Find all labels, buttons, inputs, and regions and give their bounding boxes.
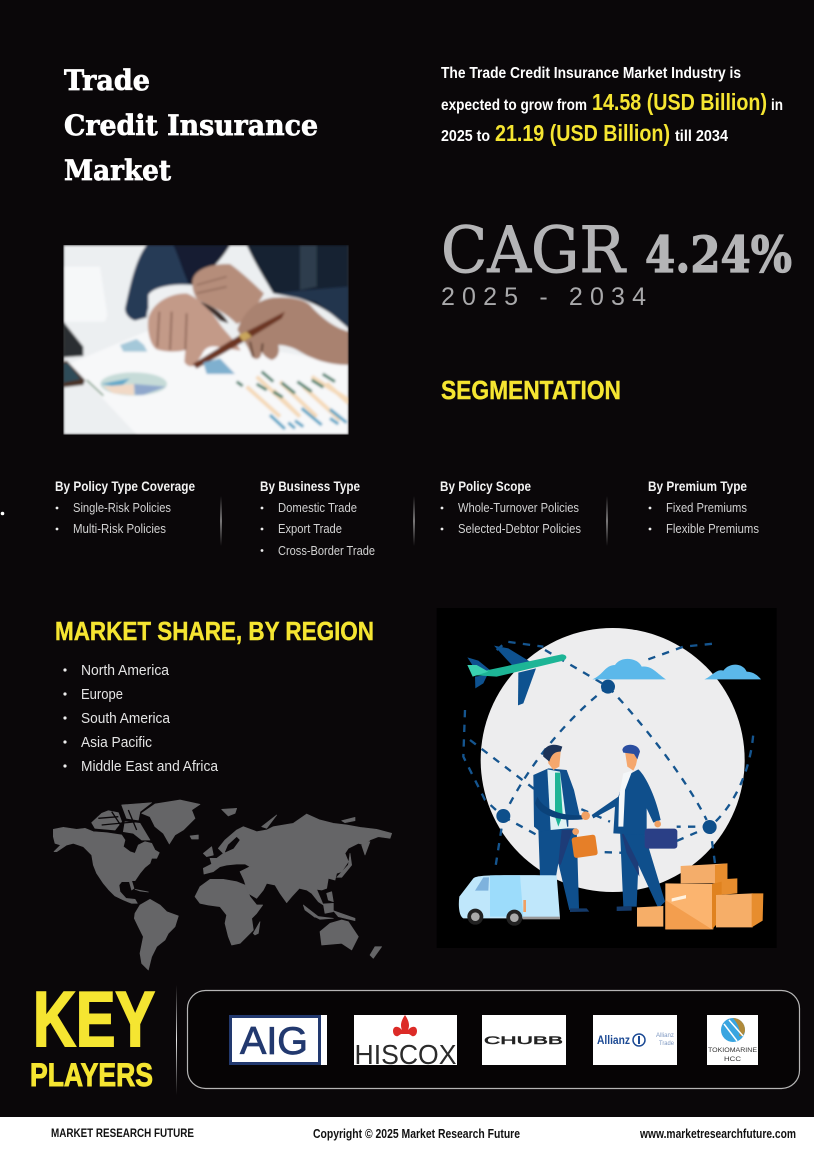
decorative dot: [1, 512, 4, 515]
heading: market share by region: MARKET SHARE, BY REGION: [55, 616, 374, 646]
segment: by business type: Cross-Border Trade: [278, 544, 375, 558]
businessman left: [533, 745, 598, 912]
footer: MARKET RESEARCH FUTURE: [51, 1126, 194, 1140]
logo: Tokio Marine HCC: [707, 1015, 758, 1065]
segment: by policy type coverage: Multi-Risk Policies: [73, 522, 166, 536]
world map: [53, 800, 392, 970]
segment: by premium type: By Premium Type: [648, 478, 747, 494]
segment: by premium type: [648, 478, 759, 536]
segment: by policy scope: Selected-Debtor Policies: [458, 522, 581, 536]
logo: Hiscox: HISCOX: [354, 1039, 457, 1070]
title: Market: [64, 154, 171, 187]
logo: Chubb: [482, 1015, 566, 1065]
market growth statement: in: [771, 97, 783, 114]
logo: AIG: [229, 1015, 327, 1065]
logo: Tokio Marine HCC: HCC: [724, 1056, 741, 1063]
region list: Middle East and Africa: [81, 758, 219, 775]
illustration: trade handshake and logistics: [437, 608, 777, 948]
heading: key players: PLAYERS: [30, 1057, 153, 1093]
dashed trade routes: [463, 642, 753, 870]
logo: Chubb: CHUBB: [484, 1035, 563, 1047]
heading: key players: [30, 975, 155, 1093]
market growth statement: 2025 to: [441, 128, 490, 145]
segment: by business type: Export Trade: [278, 522, 342, 536]
market growth statement: expected to grow from: [441, 97, 587, 114]
photo: business team reviewing charts: [63, 245, 349, 435]
segment: by policy type coverage: By Policy Type Coverage: [55, 478, 195, 494]
region list: [63, 662, 219, 775]
segment: by policy scope: Whole-Turnover Policies: [458, 501, 579, 515]
logo: Hiscox: [354, 1015, 457, 1070]
cardboard boxes: [637, 863, 763, 929]
segment: by policy type coverage: Single-Risk Policies: [73, 501, 171, 515]
CAGR figure: CAGR: [441, 214, 627, 288]
logo: Allianz Trade: Allianz: [597, 1033, 630, 1047]
airplane: [467, 646, 566, 705]
CAGR figure: [441, 214, 792, 311]
globe: [481, 628, 745, 892]
heading: segmentation: SEGMENTATION: [441, 375, 621, 405]
segment: by premium type: Flexible Premiums: [666, 522, 759, 536]
region list: South America: [81, 710, 171, 727]
segment: by business type: Domestic Trade: [278, 501, 357, 515]
logo: Tokio Marine HCC: TOKIOMARINE: [708, 1047, 758, 1054]
segment: by business type: By Business Type: [260, 478, 360, 494]
market growth statement: [441, 65, 783, 146]
title: Trade: [64, 64, 150, 97]
businessman right: [592, 745, 677, 911]
region list: Asia Pacific: [81, 734, 152, 751]
market growth statement: till 2034: [675, 128, 728, 145]
heading: key players: KEY: [33, 975, 155, 1063]
market growth statement: The Trade Credit Insurance Market Industry is: [441, 65, 741, 82]
CAGR figure: 4.24%: [645, 225, 792, 284]
market growth statement: 14.58 (USD Billion): [592, 89, 767, 115]
region list: North America: [81, 662, 170, 679]
clouds: [592, 659, 761, 679]
logo: Allianz Trade: [593, 1015, 677, 1065]
logo: Allianz Trade: Allianz: [656, 1033, 674, 1039]
segment: by business type: [260, 478, 375, 558]
title: [64, 64, 318, 187]
panel: company logos: [188, 990, 800, 1088]
van: [459, 875, 560, 926]
route nodes: [496, 680, 717, 834]
logo: Allianz Trade: Trade: [659, 1041, 675, 1047]
segment: by policy scope: [440, 478, 581, 536]
market growth statement: 21.19 (USD Billion): [495, 120, 670, 146]
footer: [0, 1117, 814, 1150]
footer: Copyright © 2025 Market Research Future: [313, 1127, 520, 1141]
region list: Europe: [81, 686, 123, 703]
segment: by policy scope: By Policy Scope: [440, 478, 531, 494]
logo: AIG: AIG: [240, 1020, 308, 1063]
title: Credit Insurance: [64, 109, 318, 142]
segment: by premium type: Fixed Premiums: [666, 501, 747, 515]
CAGR figure: 2025 - 2034: [441, 283, 646, 311]
segment: by policy type coverage: [55, 478, 195, 536]
